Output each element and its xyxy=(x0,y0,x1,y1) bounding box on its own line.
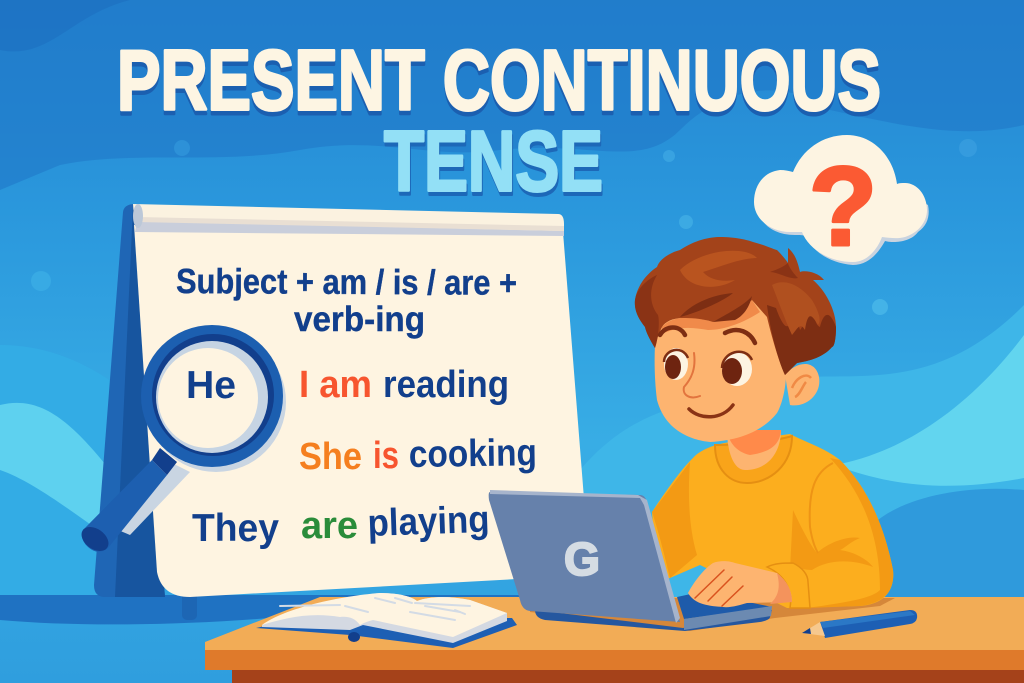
boy: eyebrows xyxy=(660,328,755,343)
magnifying glass xyxy=(77,325,286,556)
example: They are playing: are xyxy=(301,505,358,547)
thought cloud with question mark: ? xyxy=(809,144,877,269)
pencil xyxy=(802,610,917,638)
laptop xyxy=(489,490,772,631)
boy: face xyxy=(655,290,786,442)
thought cloud with question mark xyxy=(754,135,929,269)
example: They are playing: They xyxy=(192,507,279,550)
example: She is cooking xyxy=(299,432,537,478)
formula text: Subject + am / is / are + xyxy=(176,262,517,303)
magnified word: He: He xyxy=(186,364,236,407)
boy: ear xyxy=(785,364,819,405)
example: She is cooking: She xyxy=(299,436,362,478)
example: They are playing: playing xyxy=(367,499,490,545)
boy: forehead shadow xyxy=(662,300,760,334)
example: She is cooking: cooking xyxy=(409,432,537,476)
boy: nose and smile xyxy=(684,353,733,417)
formula text: verb-ing xyxy=(294,300,425,339)
table xyxy=(205,597,1024,683)
boy: hand xyxy=(688,561,792,607)
boy: sweater xyxy=(652,434,893,608)
example: I am reading xyxy=(299,364,509,406)
title: tense: TENSE xyxy=(385,118,604,214)
title: tense: TENSE xyxy=(384,114,603,210)
laptop: G xyxy=(564,533,600,585)
example: They are playing xyxy=(192,499,490,550)
formula text xyxy=(176,262,517,339)
boy: hair xyxy=(635,237,836,375)
example: I am reading: reading xyxy=(383,364,509,406)
boy: eyes xyxy=(664,348,752,386)
example: She is cooking: is xyxy=(373,435,399,477)
boy: neck xyxy=(727,430,781,470)
example: I am reading: I am xyxy=(299,364,372,406)
open book xyxy=(256,593,517,648)
flip chart stand xyxy=(94,204,197,620)
flip chart paper xyxy=(133,204,590,597)
